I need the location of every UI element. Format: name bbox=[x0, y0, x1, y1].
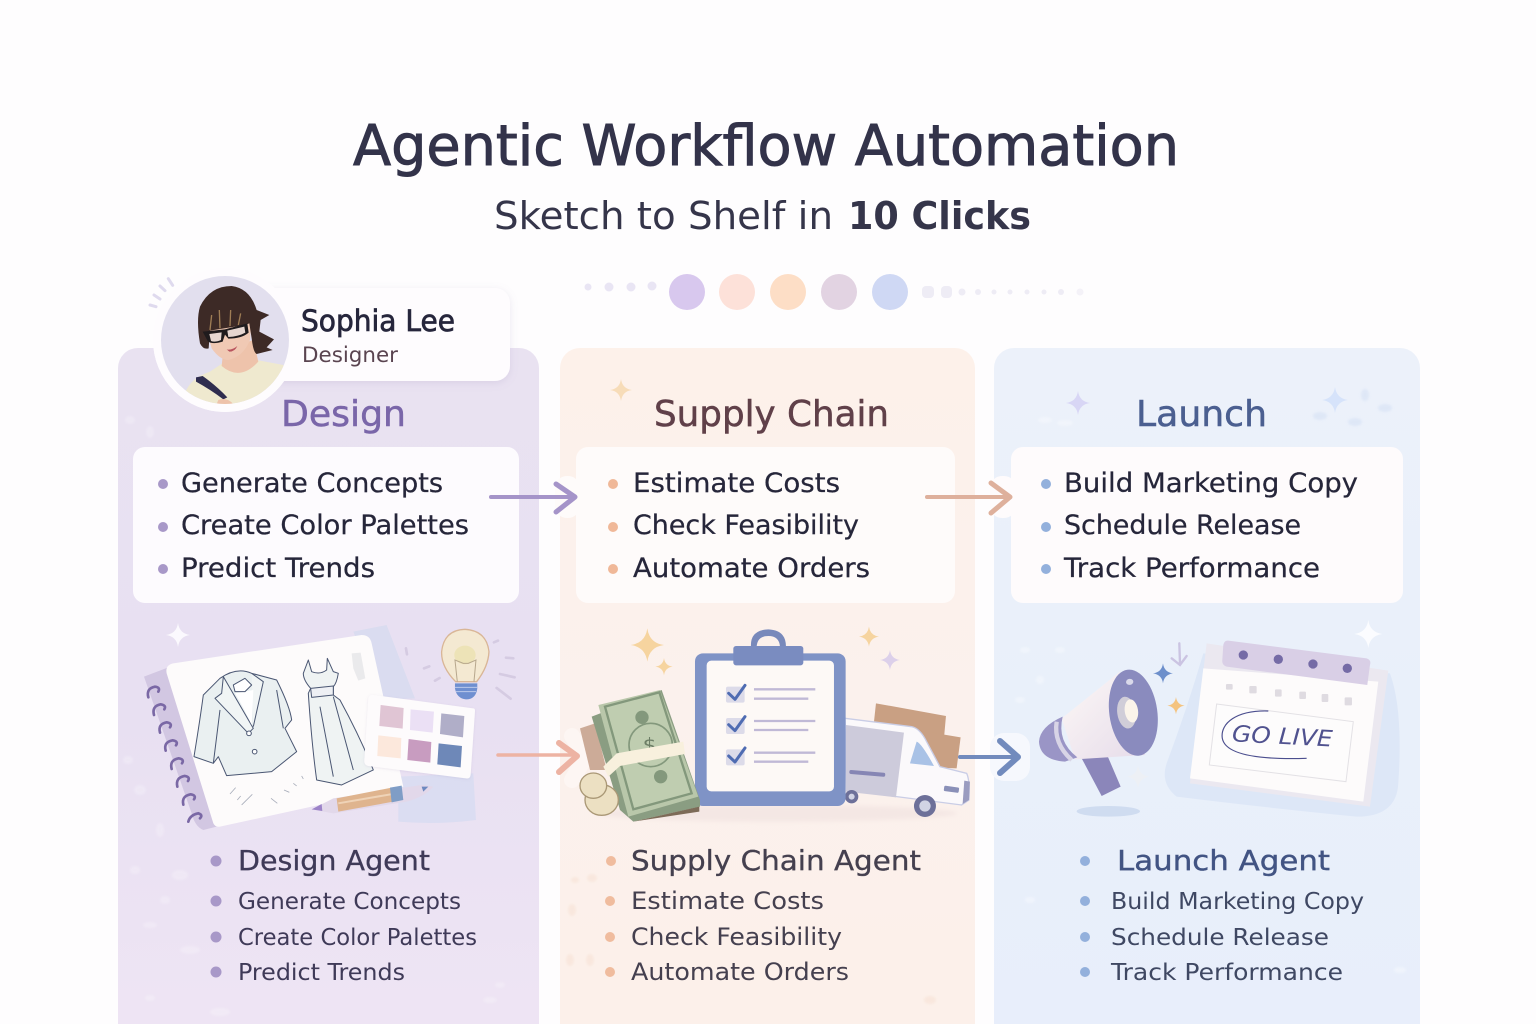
arrow: lower design to supply chain bbox=[498, 736, 586, 780]
agent list: supply chain: Supply Chain Agent bbox=[631, 844, 921, 877]
agent list: supply chain: Check Feasibility bbox=[631, 923, 842, 951]
calendar binding bbox=[1222, 641, 1370, 685]
calendar back bbox=[1190, 643, 1388, 807]
megaphone band bbox=[1056, 722, 1072, 760]
subtitle: Sketch to Shelf in bbox=[494, 194, 833, 238]
jacket sketch bbox=[194, 671, 297, 776]
card: supply chain tasks: Automate Orders bbox=[633, 553, 870, 584]
binding holes bbox=[1239, 650, 1352, 673]
card: design tasks: Predict Trends bbox=[181, 553, 375, 584]
megaphone shadow bbox=[1077, 806, 1140, 817]
agent list: launch: Schedule Release bbox=[1111, 925, 1329, 951]
cash stack bbox=[580, 690, 700, 822]
ground shadow bbox=[597, 805, 957, 822]
card: launch tasks: Schedule Release bbox=[1064, 510, 1301, 541]
card: launch tasks bbox=[1011, 447, 1403, 603]
back sheet bbox=[353, 625, 415, 700]
color palette card bbox=[364, 695, 475, 779]
heading: launch: Launch bbox=[1136, 394, 1267, 435]
cash stack: $ bbox=[643, 736, 657, 757]
arrow: supply chain to launch bbox=[927, 476, 1016, 518]
avatar: Sophia Lee bbox=[150, 273, 293, 410]
sparkle: supply chain heading bbox=[610, 379, 632, 401]
card: design tasks: Generate Concepts bbox=[181, 468, 443, 499]
arrow: design to supply chain bbox=[491, 476, 580, 518]
illustration: megaphone and calendar bbox=[1039, 620, 1400, 817]
panel: supply chain bbox=[560, 348, 975, 1024]
shadow blob behind palette bbox=[398, 773, 476, 823]
profile card: Sophia Lee bbox=[301, 304, 455, 338]
panel: launch bbox=[994, 348, 1420, 1024]
card: launch tasks: Track Performance bbox=[1063, 553, 1320, 584]
megaphone bell bbox=[1104, 666, 1163, 759]
illustration: cash, clipboard, truck bbox=[580, 627, 970, 822]
agent list: supply chain bbox=[605, 844, 921, 986]
coins bbox=[580, 773, 618, 815]
megaphone handle bbox=[1082, 750, 1121, 796]
agent list: design bbox=[210, 844, 477, 986]
megaphone rear bbox=[1039, 717, 1077, 762]
notebook page bbox=[166, 635, 403, 827]
heading: design: Design bbox=[281, 394, 406, 435]
illustration: sketchbook, palette, bulb bbox=[144, 625, 515, 830]
agent list: launch: Build Marketing Copy bbox=[1111, 889, 1364, 915]
go live note bbox=[1209, 704, 1353, 782]
card: supply chain tasks: Estimate Costs bbox=[633, 468, 840, 499]
dress sketch bbox=[303, 658, 373, 785]
arrow: lower supply chain to launch bbox=[960, 733, 1030, 781]
bulb rays bbox=[406, 641, 515, 699]
agent list: launch bbox=[1080, 844, 1364, 986]
agent list: supply chain: Automate Orders bbox=[631, 958, 849, 986]
profile card bbox=[153, 268, 510, 412]
agent list: launch: Launch Agent bbox=[1117, 844, 1330, 877]
card: supply chain tasks: Check Feasibility bbox=[633, 510, 859, 541]
megaphone body bbox=[1062, 672, 1145, 759]
agent list: design: Predict Trends bbox=[238, 960, 405, 986]
agent list: design: Design Agent bbox=[238, 844, 430, 877]
profile card: Designer bbox=[302, 343, 398, 367]
clipboard bbox=[695, 629, 846, 806]
card: design tasks bbox=[133, 447, 519, 603]
sparkle: design bbox=[166, 623, 190, 647]
spiral rings bbox=[148, 687, 201, 822]
pencil bbox=[312, 785, 433, 813]
sparkle: launch heading right bbox=[1322, 387, 1348, 413]
sparkle: launch heading left bbox=[1066, 391, 1090, 415]
agent list: supply chain: Estimate Costs bbox=[631, 887, 824, 915]
calendar page bbox=[1190, 668, 1378, 802]
calendar shadow blob bbox=[1165, 653, 1400, 817]
brown parcels bbox=[872, 703, 961, 768]
title: Agentic Workflow Automation bbox=[353, 114, 1179, 179]
card: design tasks: Create Color Palettes bbox=[181, 510, 469, 541]
subtitle: 10 Clicks bbox=[848, 194, 1031, 238]
sketch marks bbox=[230, 776, 303, 805]
go live text: GO LIVE bbox=[1231, 721, 1334, 753]
heading: supply chain: Supply Chain bbox=[654, 394, 889, 435]
light bulb bbox=[442, 629, 489, 699]
notebook spine bbox=[144, 667, 217, 830]
go live circle bbox=[1222, 711, 1307, 759]
agent list: launch: Track Performance bbox=[1110, 960, 1343, 986]
page tab marks bbox=[352, 653, 365, 681]
truck bbox=[845, 718, 970, 817]
sparkles and arrow mark bbox=[1127, 620, 1382, 788]
date marks bbox=[1226, 684, 1352, 705]
agent list: design: Generate Concepts bbox=[238, 889, 461, 915]
card: supply chain tasks bbox=[576, 447, 955, 603]
subtitle bbox=[494, 194, 1031, 238]
agent list: design: Create Color Palettes bbox=[238, 925, 477, 951]
panel: design bbox=[118, 348, 539, 1024]
avatar ring cut-out bbox=[153, 268, 297, 412]
card: launch tasks: Build Marketing Copy bbox=[1064, 468, 1358, 499]
progress dots bbox=[584, 274, 1084, 310]
sparkles bbox=[631, 627, 900, 675]
